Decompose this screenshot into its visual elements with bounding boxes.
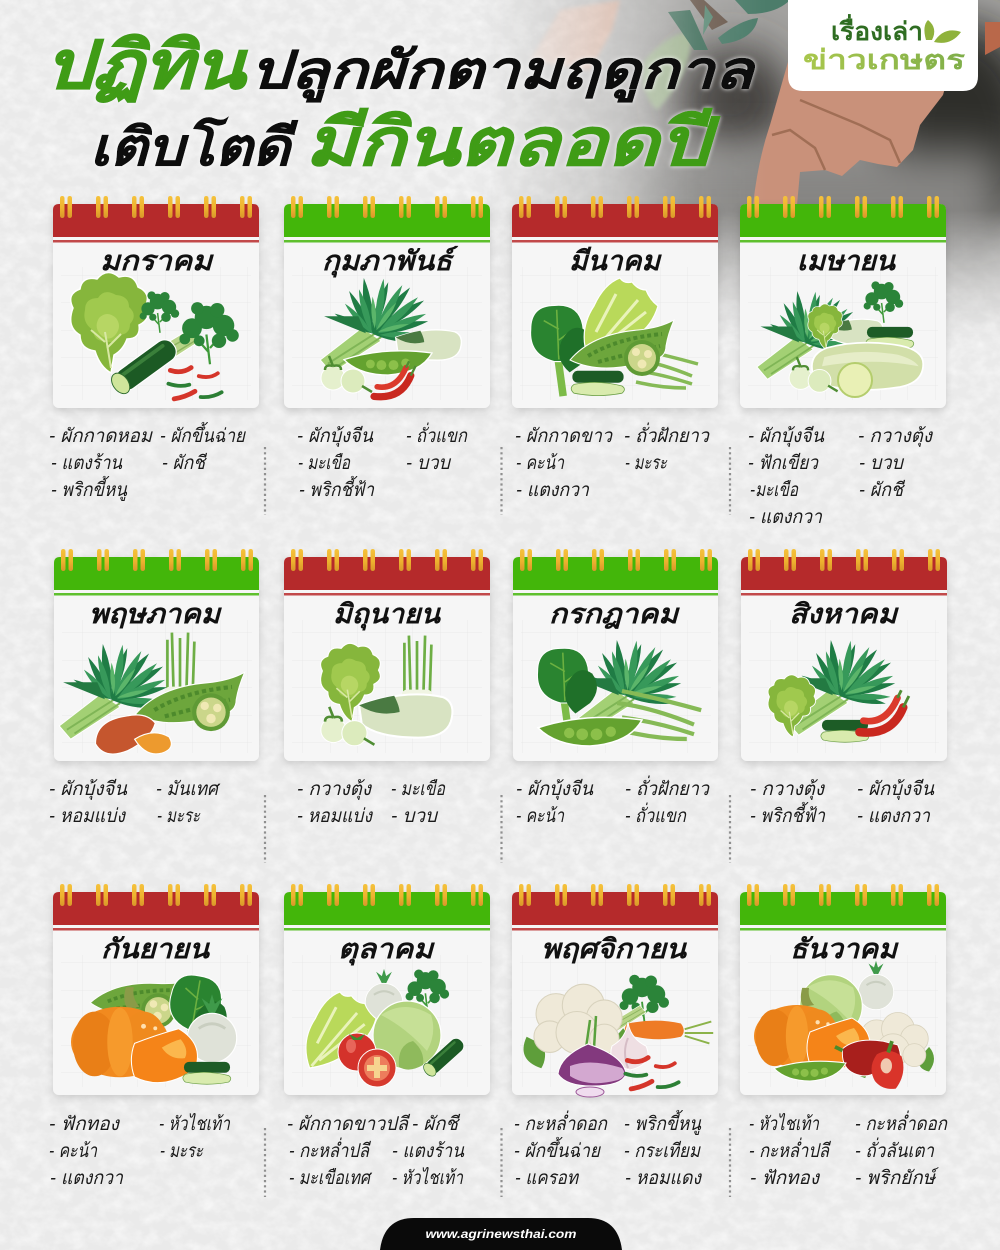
illustration: vegetables [71, 272, 239, 399]
vegetable list: - แตงร้าน [51, 453, 123, 474]
vegetable list: - แตงกวา [516, 480, 590, 501]
panel: มกราคม: มกราคม [100, 246, 214, 276]
panel: กันยายน: กันยายน [101, 934, 211, 964]
vegetable list: - กวางตุ้ง [297, 779, 373, 800]
vegetable list: - พริกชี้ฟ้า [299, 475, 375, 501]
vegetable list: - ผักกาดขาว [515, 426, 613, 447]
vegetable list: - หัวไชเท้า [159, 1112, 231, 1135]
panel: ธันวาคม [740, 884, 948, 1189]
illustration: vegetables [71, 965, 237, 1084]
vegetable list [748, 425, 934, 528]
vegetable list: - ผักกาดหอม [49, 426, 153, 447]
logo: เรื่องเล่า ข่าวเกษตร: เรื่องเล่า [831, 14, 923, 46]
title: มีกินตลอดปี [305, 105, 721, 179]
illustration: vegetables [754, 961, 934, 1089]
panel: พฤศจิกายน: พฤศจิกายน [541, 934, 688, 964]
vegetable list [49, 1112, 231, 1189]
vegetable list: - ผักบุ้งจีน [297, 425, 374, 447]
vegetable list: - กะหล่ำดอก [855, 1110, 948, 1135]
illustration: vegetables [531, 278, 698, 396]
vegetable list: - ถั่วแขก [625, 802, 687, 827]
vegetable list: - หัวไชเท้า [749, 1112, 820, 1135]
vegetable list: - หอมแบ่ง [297, 806, 374, 827]
vegetable list [750, 778, 935, 827]
panel: กุมภาพันธ์: กุมภาพันธ์ [322, 245, 459, 278]
panel: สิงหาคม: สิงหาคม [789, 599, 899, 629]
vegetable list: -มะเขือ [750, 480, 799, 501]
vegetable list: - บวบ [406, 453, 452, 474]
logo: เรื่องเล่า ข่าวเกษตร [788, 0, 978, 91]
vegetable list: - พริกชี้ฟ้า [750, 801, 826, 827]
vegetable list: - ผักชี [162, 452, 208, 474]
panel: ตุลาคม: ตุลาคม [338, 934, 435, 966]
panel: กุมภาพันธ์ [284, 196, 490, 501]
vegetable list [287, 1113, 465, 1189]
illustration: vegetables [59, 633, 245, 754]
vegetable list: - พริกขี้หนู [51, 475, 128, 501]
vegetable list: - ถั่วลันเตา [855, 1137, 935, 1162]
panel: เมษายน [740, 196, 946, 528]
vegetable list: - คะน้า [516, 806, 565, 827]
vegetable list: - ถั่วฝักยาว [625, 775, 710, 800]
logo: เรื่องเล่า ข่าวเกษตร: ข่าวเกษตร [803, 45, 966, 75]
vegetable list: - ผักขึ้นฉ่าย [160, 421, 247, 447]
vegetable list: - มะเขือ [391, 779, 446, 800]
vegetable list: - กวางตุ้ง [858, 426, 934, 447]
panel: กันยายน [49, 884, 259, 1189]
vegetable list: - บวบ [391, 806, 439, 827]
vegetable list [297, 779, 446, 827]
vegetable list: - มะเขือ [298, 453, 351, 474]
vegetable list: - หอมแดง [625, 1168, 703, 1189]
vegetable list: - แตงกวา [50, 1168, 124, 1189]
vegetable list: - ผักบุ้งจีน [857, 778, 935, 800]
panel: มิถุนายน: มิถุนายน [333, 599, 442, 631]
illustration: vegetables [321, 636, 452, 746]
panel: มิถุนายน [284, 549, 490, 827]
vegetable list: - ผักบุ้งจีน [748, 425, 825, 447]
panel: มีนาคม: มีนาคม [569, 246, 662, 276]
vegetable list: - คะน้า [49, 1141, 98, 1162]
vegetable list: - ฟักทอง [750, 1168, 821, 1189]
vegetable list [749, 1110, 948, 1189]
vegetable list: - มะระ [625, 453, 668, 474]
title [45, 28, 757, 179]
vegetable list: - กะหล่ำปลี [749, 1137, 832, 1162]
illustration: vegetables [524, 975, 713, 1097]
vegetable list: - ถั่วแขก [406, 422, 468, 447]
panel: สิงหาคม [741, 549, 947, 827]
vegetable list: - บวบ [859, 453, 905, 474]
vegetable list [49, 778, 221, 827]
vegetable list: - ผักบุ้งจีน [49, 778, 128, 800]
vegetable list: - หอมแบ่ง [49, 806, 127, 827]
illustration: vegetables [537, 639, 701, 746]
vegetable list: - ฟักเขียว [748, 452, 819, 474]
vegetable list: - มะเขือเทศ [289, 1168, 372, 1189]
vegetable list: - ฟักทอง [49, 1114, 121, 1135]
vegetable list: - พริกขี้หนู [624, 1109, 702, 1135]
footer: website pill [380, 1218, 622, 1250]
panel: พฤษภาคม: พฤษภาคม [89, 599, 222, 629]
vegetable list: - มะระ [160, 1141, 204, 1162]
vegetable list [49, 421, 247, 501]
vegetable list: - ถั่วฝักยาว [624, 422, 710, 447]
illustration: vegetables [757, 281, 923, 397]
vegetable list [516, 775, 710, 827]
panel: เมษายน: เมษายน [797, 246, 897, 276]
vegetable list [297, 422, 468, 501]
vegetable list [514, 1109, 703, 1189]
vegetable list: - มะระ [157, 806, 201, 827]
illustration: vegetables [306, 969, 467, 1087]
illustration: vegetables [768, 639, 909, 742]
panel: ตุลาคม [284, 884, 490, 1189]
vegetable list: - กะหล่ำปลี [289, 1137, 372, 1162]
panel: พฤษภาคม [49, 549, 259, 827]
vegetable list: - แครอท [515, 1168, 579, 1189]
vegetable list: - คะน้า [516, 453, 565, 474]
panel: ธันวาคม: ธันวาคม [790, 934, 899, 964]
vegetable list: - มันเทศ [156, 779, 221, 800]
vegetable list: - ผักชี [859, 479, 906, 501]
footer: website pill: www.agrinewsthai.com [426, 1227, 577, 1241]
background photo: hands planting seedling [480, 0, 1000, 340]
title: ปลูกผักตามฤดูกาล [250, 42, 757, 103]
title: ปฏิทิน [45, 28, 248, 103]
vegetable list: - ผักบุ้งจีน [516, 778, 594, 800]
vegetable list [515, 422, 710, 501]
title: เติบโตดี [90, 116, 299, 177]
vegetable list: - ผักขึ้นฉ่าย [514, 1136, 602, 1162]
vegetable list: - แตงกวา [857, 806, 931, 827]
vegetable list: - ผักชี [412, 1113, 461, 1135]
vegetable list: - กวางตุ้ง [750, 779, 826, 800]
vegetable list: - กะหล่ำดอก [514, 1110, 608, 1135]
panel: พฤศจิกายน [512, 884, 718, 1189]
illustration: vegetables [320, 277, 461, 397]
panel: กรกฎาคม [513, 549, 718, 827]
vegetable list: - หัวไชเท้า [392, 1166, 464, 1189]
vegetable list: - แตงร้าน [392, 1141, 465, 1162]
panel: กรกฎาคม: กรกฎาคม [549, 599, 680, 629]
vegetable list: - แตงกวา [749, 507, 823, 528]
panel: มีนาคม [512, 196, 718, 501]
vegetable list: - พริกยักษ์ [855, 1167, 939, 1189]
panel: มกราคม [49, 196, 259, 501]
vegetable list: - ผักกาดขาวปลี [287, 1113, 411, 1135]
vegetable list: - กระเทียม [624, 1140, 701, 1162]
